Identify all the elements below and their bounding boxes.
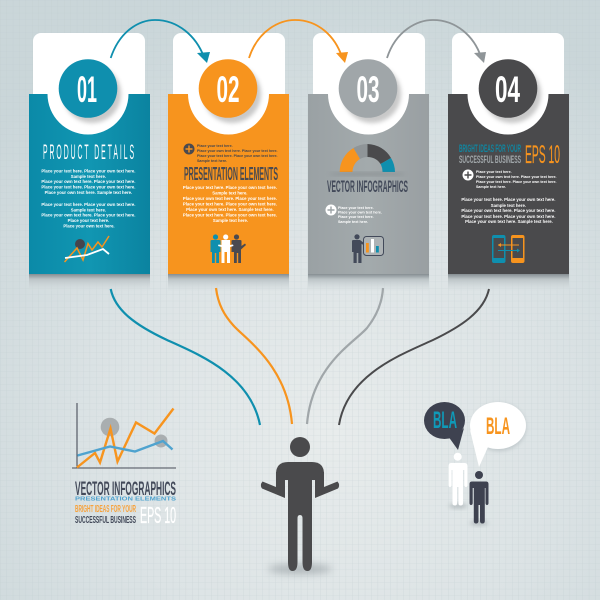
- chart caption: PRESENTATION ELEMENTS: [75, 496, 177, 502]
- body text: Sample text here.: [71, 174, 106, 179]
- arrow: 02 to 03: [249, 20, 348, 63]
- body text: Place your own text here. Place your text here.: [41, 212, 135, 218]
- white person: [448, 453, 468, 508]
- panel: 01 product details: [29, 33, 150, 291]
- panel: 04 bright ideas: [448, 33, 569, 291]
- white speech bubble: BLA: [486, 413, 510, 440]
- text: PRODUCT DETAILS: [43, 141, 136, 164]
- panel: 02 presentation elements: [168, 33, 289, 291]
- text: EPS 10: [140, 502, 176, 528]
- dark speech bubble: BLA: [433, 407, 457, 434]
- number 02: 02: [216, 69, 240, 110]
- icon: presenter with chart: [352, 234, 384, 263]
- small text: Place your text here. Place your own text here.: [197, 154, 278, 158]
- body text: Place your text here. Place your own text here.: [41, 168, 135, 174]
- curve: gray: [307, 288, 383, 424]
- chart caption: SUCCESSFUL BUSINESS: [75, 515, 136, 526]
- body text: Place your text here. Place your own text here.: [183, 212, 277, 218]
- body text: Sample text here.: [213, 218, 248, 223]
- small text: Place your text here.: [476, 170, 512, 174]
- body text: Sample text here.: [71, 208, 106, 212]
- icon: plus: [462, 170, 474, 180]
- text: VECTOR INFOGRAPHICS: [327, 177, 408, 196]
- text: PRESENTATION ELEMENTS: [184, 163, 278, 184]
- number 04: 04: [495, 69, 520, 110]
- number 03: 03: [356, 69, 380, 110]
- small text: Place your own text here. Place your text here.: [476, 175, 557, 179]
- dark person: [470, 471, 488, 526]
- panel: 03 vector infographics: [308, 33, 429, 291]
- body text: Place your text here. Place your own text here.: [461, 197, 555, 202]
- chart caption: [75, 478, 177, 528]
- curve: teal: [111, 289, 260, 425]
- slogan: [459, 141, 560, 169]
- icon: plus: [326, 204, 336, 216]
- small text: Sample text here.: [338, 220, 368, 224]
- panel: 01 product details: 01: [77, 69, 97, 110]
- body text: Place your text here. Place your own text here.: [183, 202, 277, 206]
- icon: two phones: [492, 235, 524, 263]
- text: VECTOR INFOGRAPHICS: [75, 478, 176, 500]
- body text: Place your own text here.: [63, 224, 115, 228]
- line chart: [72, 403, 176, 468]
- body text: Place your own text here. Sample text here.: [186, 207, 274, 212]
- arrow: 03 to 04: [387, 20, 486, 63]
- curve: orange: [216, 288, 292, 424]
- small text: Place your text here.: [338, 206, 374, 210]
- body text: Place your own text here. Sample text here.: [45, 190, 132, 195]
- body text: Place your own text here. Sample text here.: [465, 219, 553, 224]
- body text: Sample text here.: [212, 190, 248, 196]
- body text: Place your text here.: [68, 218, 109, 223]
- people talking: [424, 402, 526, 526]
- body text: Place your text here. Place your own text here.: [183, 185, 277, 190]
- small text: Place your text here.: [338, 215, 374, 219]
- half donut chart: [329, 144, 405, 176]
- body text: Place your text here. Place your own text here.: [41, 202, 135, 207]
- arrow: 01 to 02: [111, 20, 210, 63]
- small text: Place your own text here. Place your text here.: [197, 149, 278, 153]
- body text: Place your text here. Place your own text here.: [461, 214, 555, 219]
- body text: Place your own text here. Place your text here.: [461, 208, 555, 213]
- small text: Sample text here.: [197, 159, 227, 163]
- slogan: BRIGHT IDEAS FOR YOUR: [459, 143, 521, 155]
- body text: Place your own text here. Place your text here.: [41, 179, 135, 184]
- main person: [261, 437, 339, 574]
- icon: plus: [184, 144, 194, 154]
- curve: dark: [339, 289, 489, 425]
- icon: mini chart: [64, 236, 109, 262]
- body text: Place your text here. Place your own text here.: [41, 184, 135, 190]
- small text: Place your own text here.: [338, 210, 382, 214]
- small text: Sample text here.: [476, 185, 506, 189]
- body text: Place your own text here. Place your text here.: [183, 196, 277, 201]
- slogan: SUCCESSFUL BUSINESS: [459, 154, 521, 166]
- small text: Place your text here. Place your own text here.: [476, 180, 557, 184]
- small text: Place your text here.: [197, 144, 233, 148]
- chart caption: BRIGHT IDEAS FOR YOUR: [75, 504, 136, 515]
- body text: Sample text here.: [491, 203, 526, 208]
- icon: three people: [210, 234, 246, 263]
